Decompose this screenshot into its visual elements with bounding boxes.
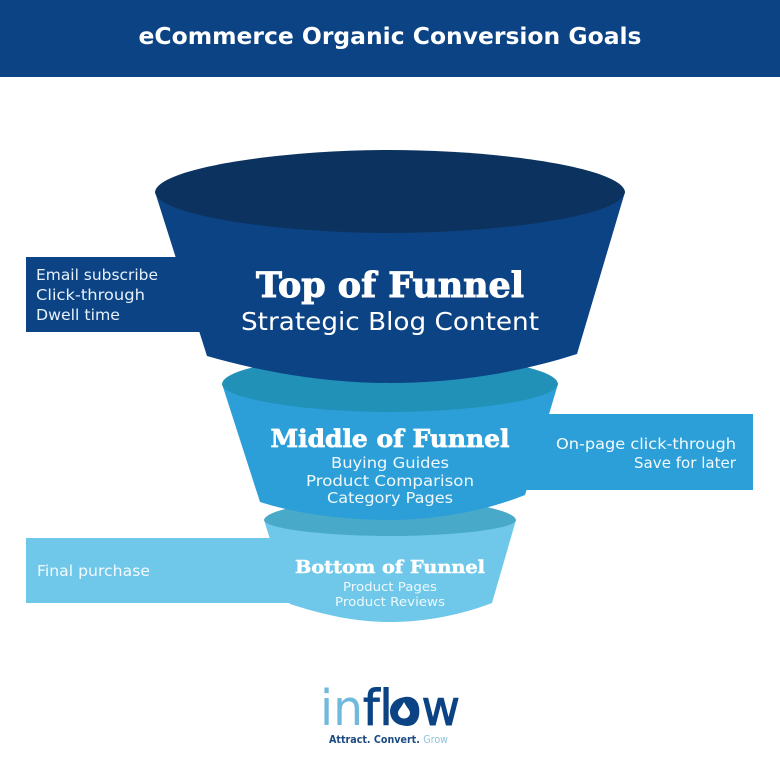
logo: inflow	[320, 680, 460, 746]
goal box: top of funnel: Click-through	[36, 286, 145, 304]
funnel text: bottom: Product Reviews	[335, 594, 445, 609]
funnel text: middle: Middle of Funnel	[270, 424, 510, 453]
goal box: middle of funnel: Save for later	[634, 454, 737, 472]
funnel rim: middle	[222, 355, 558, 412]
funnel text: middle: Buying Guides	[331, 454, 449, 472]
logo tagline: Attract. Convert. Grow	[329, 734, 448, 746]
funnel text: top: Top of Funnel	[256, 265, 524, 306]
funnel body: bottom	[264, 520, 516, 622]
goal box: top of funnel: Email subscribe	[36, 266, 158, 284]
funnel rim: top	[155, 150, 625, 233]
funnel rim: bottom	[264, 498, 516, 536]
goal box: middle of funnel: On-page click-through	[556, 435, 736, 453]
funnel text: top: Strategic Blog Content	[241, 307, 539, 336]
goal box: middle of funnel	[520, 414, 753, 490]
funnel body: middle	[222, 384, 558, 520]
funnel text: top	[241, 265, 539, 336]
header banner	[0, 0, 780, 77]
funnel body: top	[155, 192, 625, 383]
funnel text: middle: Category Pages	[327, 489, 453, 507]
title: eCommerce Organic Conversion Goals	[138, 24, 642, 50]
funnel text: middle	[270, 424, 510, 507]
goal box: top of funnel	[26, 257, 226, 332]
panel: middle of funnel	[222, 355, 753, 520]
logo wordmark: inflow	[320, 680, 460, 737]
icon: water drop in logo	[390, 698, 418, 726]
panel: top of funnel	[26, 150, 625, 383]
funnel text: bottom	[295, 557, 485, 609]
goal box: bottom of funnel	[26, 538, 296, 603]
funnel text: bottom: Product Pages	[343, 579, 437, 594]
goal box: bottom of funnel: Final purchase	[37, 562, 150, 580]
panel: bottom of funnel	[26, 498, 516, 622]
funnel text: middle: Product Comparison	[306, 472, 474, 490]
goal box: top of funnel: Dwell time	[36, 306, 120, 324]
funnel text: bottom: Bottom of Funnel	[295, 557, 485, 578]
